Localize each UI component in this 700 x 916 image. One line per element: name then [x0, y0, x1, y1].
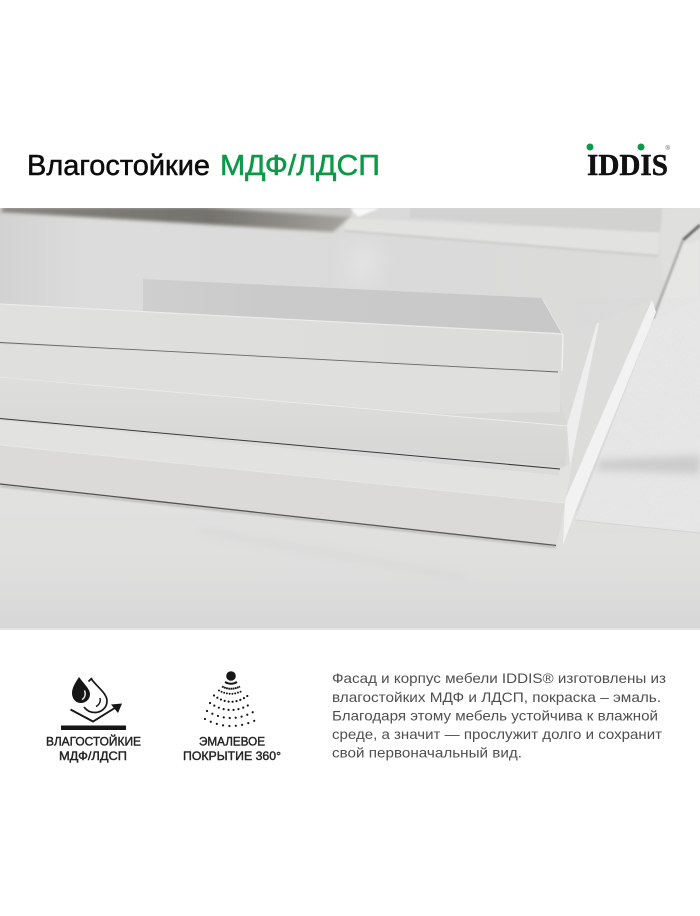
corner post and shadow [662, 209, 668, 224]
dark line under board 4 [0, 484, 556, 546]
board 3 front [0, 378, 30, 418]
title: Влагостойкие [27, 150, 210, 182]
icon: enamel spray 360 [205, 671, 258, 726]
board 4 front [0, 446, 433, 502]
board 1 front [0, 304, 47, 344]
back shelf strip [412, 209, 661, 232]
surface between boards on the right [560, 300, 652, 500]
board 1 top surface [143, 279, 562, 333]
label: enamel coating: ПОКРЫТИЕ 360° [183, 749, 281, 763]
board 2 front [0, 344, 106, 386]
logo: IDDIS: ® [666, 145, 670, 152]
gap line between boards 1 and 2 [0, 342, 558, 372]
description text: свой первоначальный вид. [332, 744, 522, 760]
label: enamel coating [183, 734, 281, 763]
title [27, 150, 380, 182]
board 3 top surface [0, 360, 567, 426]
board 4 side strip [563, 300, 656, 545]
faint reflection on floor [200, 530, 465, 578]
label: enamel coating: ЭМАЛЕВОЕ [199, 734, 265, 748]
logo: IDDIS: IDDIS [587, 147, 668, 182]
description text: Благодаря этому мебель устойчива к влажной [332, 708, 658, 724]
label: moisture-resistant: ВЛАГОСТОЙКИЕ [46, 734, 141, 748]
foam sheet [575, 298, 700, 533]
board 4 top surface [0, 420, 66, 451]
photo: stacked white boards [0, 206, 700, 630]
icon: moisture-resistant drops [61, 677, 126, 730]
board 3 right strip [567, 323, 599, 468]
title: МДФ/ЛДСП [220, 150, 380, 182]
dark blurred panel [210, 208, 352, 218]
description text: Фасад и корпус мебели IDDIS® изготовлены из [332, 670, 666, 686]
description text: среде, а значит — прослужит долго и сохранит [332, 726, 663, 742]
description text [332, 670, 666, 760]
dark line above board 4 [0, 418, 560, 469]
floor surface [0, 485, 60, 603]
description text: влагостойких МДФ и ЛДСП, покраска – эмаль. [332, 689, 661, 705]
label: moisture-resistant [46, 734, 141, 763]
label: moisture-resistant: МДФ/ЛДСП [59, 749, 127, 763]
soft reflection [350, 245, 380, 285]
